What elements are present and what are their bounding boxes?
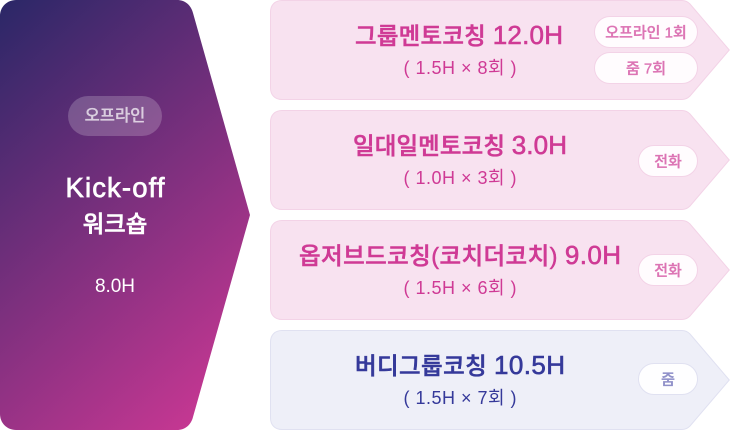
heading: buddy group coaching hours: 버디그룹코칭 10.5H	[355, 350, 565, 380]
text: 8.0 hours: 8.0H	[95, 276, 135, 297]
badge: phone	[638, 146, 698, 176]
badge: phone: 전화	[654, 262, 682, 280]
heading: one-on-one coaching hours: 일대일멘토코칭 3.0H	[353, 130, 567, 160]
badge: zoom seven times	[594, 52, 698, 84]
text: group mentor schedule: ( 1.5H × 8회 )	[404, 58, 516, 78]
panel: observer coaching	[270, 220, 729, 320]
arrow shape: group mentor background	[270, 0, 729, 100]
heading: observer coaching hours: 옵저브드코칭(코치더코치) 9.0H	[299, 240, 621, 270]
badge: zoom seven times: 줌 7회	[626, 60, 666, 78]
badge: offline once	[594, 16, 698, 48]
heading: kick-off workshop: 워크숍	[83, 211, 147, 237]
heading: group mentor coaching hours: 그룹멘토코칭 12.0H	[355, 20, 563, 50]
panel: group mentor coaching	[270, 0, 729, 100]
text: observer schedule: ( 1.5H × 6회 )	[404, 278, 516, 298]
badge: zoom	[638, 364, 698, 394]
text: one-on-one schedule: ( 1.0H × 3회 )	[404, 168, 516, 188]
heading: kick-off workshop	[66, 172, 165, 237]
badge: phone: 전화	[654, 154, 682, 170]
arrow shape: kick-off background	[0, 0, 250, 430]
arrow shape: buddy group background	[270, 330, 729, 430]
arrow shape: one-on-one background	[270, 110, 729, 210]
panel: one-on-one mentor coaching	[270, 110, 729, 210]
arrow shape: observer background	[270, 220, 729, 320]
badge: zoom: 줌	[661, 372, 675, 388]
panel: buddy group coaching	[270, 330, 729, 430]
badge: offline: 오프라인	[85, 106, 145, 125]
text: buddy group schedule: ( 1.5H × 7회 )	[404, 388, 516, 408]
panel: kick-off workshop	[0, 0, 250, 430]
badge: phone	[638, 254, 698, 286]
badge: offline	[68, 96, 162, 136]
badge: offline once: 오프라인 1회	[605, 24, 687, 42]
heading: kick-off workshop: Kick-off	[66, 172, 165, 203]
